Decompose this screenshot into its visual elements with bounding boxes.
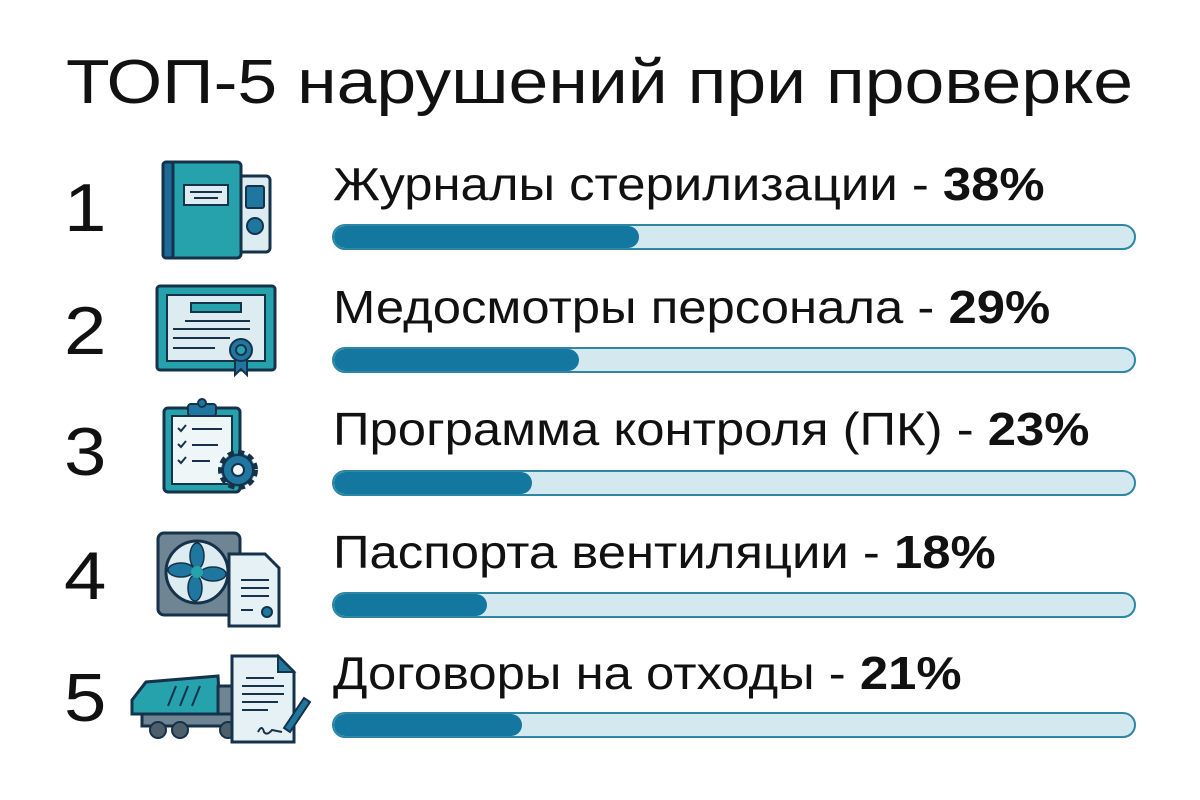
icon: ventilation fan with document [156, 532, 280, 628]
row 5 [64, 647, 1136, 744]
bar 1 [332, 224, 1136, 250]
label 2: Медосмотры персонала - 29% [333, 281, 1050, 333]
title: ТОП-5 нарушений при проверке [66, 48, 1133, 117]
number 3: 3 [64, 414, 106, 490]
icon: clipboard with gear [162, 398, 258, 494]
icon: certificate [156, 284, 276, 378]
number 5: 5 [64, 660, 106, 736]
bar 2 [332, 347, 1136, 373]
label 3: Программа контроля (ПК) - 23% [333, 403, 1090, 455]
icon: garbage truck with contract [130, 654, 312, 744]
number 2: 2 [64, 293, 106, 369]
row 1 [64, 158, 1136, 260]
number 4: 4 [64, 538, 106, 614]
row 4 [64, 526, 1136, 628]
bar 3 [332, 470, 1136, 496]
icon: sterilization journal [162, 160, 272, 260]
bar 4 [332, 592, 1136, 618]
label 5: Договоры на отходы - 21% [333, 647, 962, 699]
label 1: Журналы стерилизации - 38% [333, 158, 1045, 210]
row 3 [64, 398, 1136, 496]
bar 5 [332, 712, 1136, 738]
label 4: Паспорта вентиляции - 18% [333, 526, 996, 578]
number 1: 1 [64, 170, 106, 246]
row 2 [64, 281, 1136, 378]
